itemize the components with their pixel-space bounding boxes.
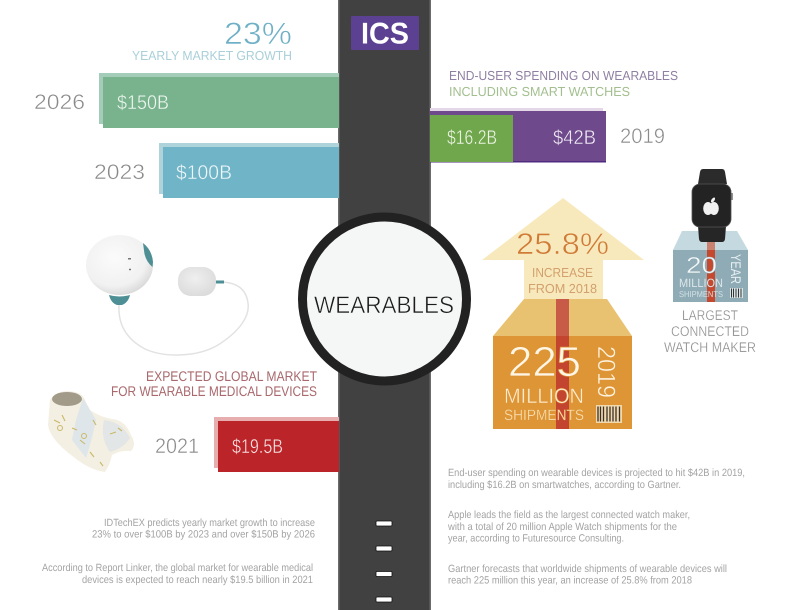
text block: spending note [448,467,745,491]
icon: apple watch [692,169,733,242]
bar: 2023 $100B: $100B [176,162,232,184]
icon: shipping box 225 million shipments: MILLION [504,385,584,408]
heading: expected global market: EXPECTED GLOBAL MARKET [146,368,317,384]
text block: medical devices note [42,562,313,586]
icon: small box 20 million shipments: 20 [686,252,717,278]
bar: 2026 $150B [34,73,339,128]
icon: apple logo [703,197,719,215]
illustration: wearable medical pump device [86,235,248,355]
icon: arrow with 25.8% increase: 25.8% [516,228,609,261]
icon: arrow with 25.8% increase: FROM 2018 [528,281,597,296]
logo: ICS: ICS [361,18,409,50]
bar: 2026 $150B: 2026 [34,91,85,114]
icon: shipping box 225 million shipments: SHIPMENTS [504,407,584,424]
text block: market growth note: IDTechEX predicts yearly market growth to increase [104,517,315,529]
text block: shipments note: reach 225 million this year, an increase of 25.8% from 2018 [448,574,692,586]
bar: 2026 $150B: $150B [117,92,169,114]
icon: small box 20 million shipments: YEAR [728,254,744,284]
central watch face: wearables: WEARABLES [314,292,454,319]
heading: expected global market: FOR WEARABLE MEDICAL DEVICES [111,383,317,399]
bar: 2019 spending: 2019 [620,125,665,148]
icon: arrow with 25.8% increase [482,198,644,300]
icon: small box 20 million shipments: SHIPMENTS [679,289,723,299]
central watch face: wearables [302,217,466,381]
bar: 2021 $19.5B: $19.5B [232,436,283,458]
text block: spending note: End-user spending on wearable devices is projected to hit $42B in 2019, [448,467,745,479]
text block: market growth note [92,517,315,540]
bar: 2021 $19.5B: 2021 [155,435,199,458]
bar: 2019 spending: $16.2B [447,127,497,149]
bar: 2023 $100B: 2023 [94,161,145,184]
stat: 23% yearly market growth [132,16,292,63]
text block: shipments note: Gartner forecasts that worldwide shipments of wearable devices will [448,563,727,575]
caption: largest connected watch maker: WATCH MAKER [664,339,756,355]
heading: end-user spending on wearables [449,68,678,99]
bar: 2019 spending: $42B [553,127,596,149]
text block: apple note [447,509,690,544]
text block: spending note: including $16.2B on smartwatches, according to Gartner. [448,479,681,491]
text block: apple note: year, according to Futuresource Consulting. [448,532,624,544]
bar: 2019 spending [430,108,665,162]
illustration: baby bootie wrap [48,391,134,472]
icon: small box 20 million shipments: MILLION [679,276,723,290]
icon: shipping box 225 million shipments [493,299,632,429]
caption: largest connected watch maker [664,307,756,355]
caption: largest connected watch maker: CONNECTED [671,323,749,339]
bar: 2023 $100B [94,143,339,198]
stat: 23% yearly market growth: YEARLY MARKET GROWTH [132,48,292,63]
icon: small box 20 million shipments [673,231,748,302]
text block: medical devices note: According to Report Linker, the global market for wearable medical [42,562,313,574]
icon: barcode [596,405,622,423]
heading: expected global market [111,368,317,399]
icon: small barcode [730,288,743,298]
watch strap holes [376,521,392,602]
heading: end-user spending on wearables: END-USER SPENDING ON WEARABLES [449,68,678,83]
icon: arrow with 25.8% increase: INCREASE [532,265,593,280]
stat: 23% yearly market growth: 23% [224,16,292,51]
text block: market growth note: 23% to over $100B by 2023 and over $150B by 2026 [92,528,315,540]
heading: end-user spending on wearables: INCLUDING SMART WATCHES [449,84,630,99]
icon: shipping box 225 million shipments: 2019 [592,346,620,398]
text block: apple note: Apple leads the field as the largest connected watch maker, [448,509,690,521]
text block: medical devices note: devices is expected to reach nearly $19.5 billion in 2021 [82,574,313,586]
text block: shipments note [448,563,727,586]
panel: watch strap centre band [338,0,431,610]
text block: apple note: with a total of 20 million Apple Watch shipments for the [447,521,677,533]
bar: 2021 $19.5B [155,417,339,472]
caption: largest connected watch maker: LARGEST [682,307,738,323]
icon: shipping box 225 million shipments: 225 [508,338,581,385]
